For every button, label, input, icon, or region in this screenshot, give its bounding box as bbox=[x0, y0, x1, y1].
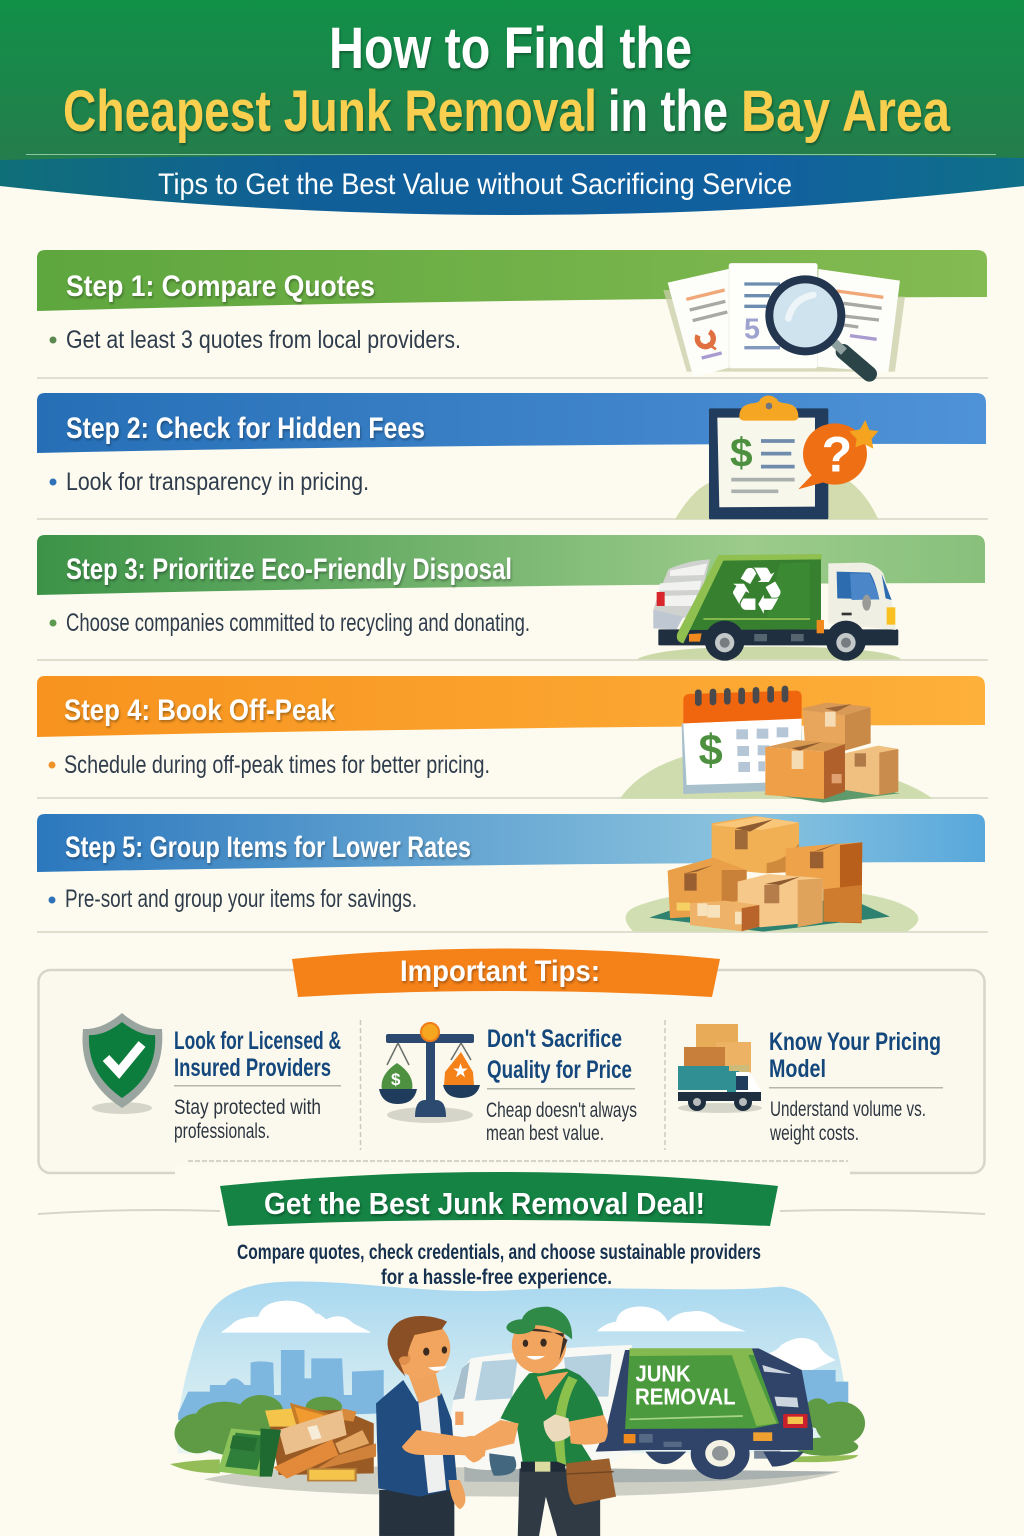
tip: pricing model: Know Your Pricing bbox=[769, 1028, 941, 1056]
person: customer bbox=[376, 1316, 487, 1536]
panel: step 3 bbox=[37, 535, 988, 661]
green bin bbox=[218, 1428, 281, 1477]
icon: balance scale bbox=[379, 1023, 480, 1123]
tip: licensed providers: Insured Providers bbox=[174, 1054, 331, 1082]
title: How to Find the bbox=[329, 16, 692, 81]
tip: quality for price: Don't Sacrifice bbox=[487, 1025, 622, 1053]
icon: calendar and boxes bbox=[620, 689, 933, 803]
title bbox=[63, 16, 951, 144]
panel: step 1 bbox=[37, 250, 988, 379]
tip: pricing model: weight costs. bbox=[769, 1122, 859, 1145]
white van bbox=[448, 1345, 632, 1476]
subtitle: Tips to Get the Best Value without Sacrificing Service bbox=[158, 168, 792, 201]
icon: stacked boxes bbox=[626, 816, 918, 932]
tip: quality for price: Quality for Price bbox=[487, 1056, 632, 1084]
tip: pricing model: Model bbox=[769, 1055, 826, 1083]
junk removal truck: REMOVAL bbox=[635, 1385, 736, 1410]
icon: documents and magnifier: 5 bbox=[744, 313, 760, 345]
step 3 text: Choose companies committed to recycling and donating. bbox=[66, 609, 530, 637]
icon: clipboard with question bubble: $ bbox=[730, 430, 753, 476]
ground bbox=[204, 1466, 840, 1497]
sky bbox=[177, 1282, 849, 1453]
step 4 text: Schedule during off-peak times for better pricing. bbox=[64, 751, 490, 779]
icon: shield with check bbox=[82, 1013, 162, 1114]
icon: recycling truck bbox=[637, 553, 902, 661]
step 5 text: Pre-sort and group your items for savings. bbox=[65, 885, 417, 913]
bushes bbox=[175, 1395, 865, 1457]
tip: licensed providers: professionals. bbox=[174, 1120, 270, 1143]
person: driver bbox=[460, 1307, 616, 1536]
icon: balance scale: ★ bbox=[452, 1060, 469, 1082]
tip: quality for price: mean best value. bbox=[486, 1122, 604, 1145]
tip: licensed providers: Look for Licensed & bbox=[174, 1027, 341, 1055]
tip: quality for price: Cheap doesn't always bbox=[486, 1099, 637, 1122]
tip: pricing model: Understand volume vs. bbox=[770, 1098, 926, 1121]
icon: calendar and boxes: $ bbox=[699, 727, 723, 775]
step 3 heading: Step 3: Prioritize Eco-Friendly Disposal bbox=[66, 553, 512, 586]
city skyline bbox=[178, 1350, 848, 1420]
clouds bbox=[221, 1301, 836, 1373]
panel: step 5 bbox=[37, 814, 988, 933]
title: Bay Area bbox=[741, 79, 951, 144]
step 1 heading: Step 1: Compare Quotes bbox=[66, 270, 375, 303]
title: Cheapest Junk Removal bbox=[63, 79, 597, 144]
tip: licensed providers bbox=[82, 1013, 341, 1143]
illustration: handshake with junk removal truck bbox=[170, 1282, 865, 1536]
step 5 heading: Step 5: Group Items for Lower Rates bbox=[65, 831, 471, 864]
icon: clipboard with question bubble: ? bbox=[822, 427, 852, 483]
icon: balance scale: $ bbox=[391, 1070, 401, 1089]
step 4 heading: Step 4: Book Off-Peak bbox=[64, 694, 335, 727]
step 2 heading: Step 2: Check for Hidden Fees bbox=[66, 412, 425, 445]
icon: documents and magnifier bbox=[663, 263, 905, 377]
junk removal truck bbox=[596, 1348, 813, 1479]
step 2 text: Look for transparency in pricing. bbox=[66, 468, 369, 496]
call to action ribbon bbox=[38, 1172, 985, 1226]
panel: step 2 bbox=[37, 393, 988, 520]
junk removal truck: JUNK bbox=[635, 1362, 691, 1387]
tips heading: Important Tips: bbox=[400, 955, 600, 988]
icon: recycling truck: ♻ bbox=[727, 553, 786, 629]
tip: quality for price bbox=[379, 1023, 637, 1145]
panel: important tips bbox=[38, 948, 984, 1177]
header banner bbox=[0, 0, 1024, 215]
title: in the bbox=[608, 79, 728, 144]
tips ribbon bbox=[292, 948, 720, 997]
call to action text: Compare quotes, check credentials, and choose sustainable providers bbox=[237, 1241, 761, 1264]
step 1 text: Get at least 3 quotes from local providers. bbox=[66, 326, 461, 354]
tip: licensed providers: Stay protected with bbox=[174, 1096, 321, 1119]
icon: clipboard with question bubble bbox=[675, 395, 878, 519]
panel: step 4 bbox=[37, 676, 988, 803]
icon: loaded truck bbox=[678, 1024, 762, 1113]
call to action heading: Get the Best Junk Removal Deal! bbox=[264, 1186, 705, 1221]
call to action text bbox=[237, 1241, 761, 1289]
junk pile bbox=[265, 1405, 376, 1481]
call to action text: for a hassle-free experience. bbox=[381, 1266, 612, 1289]
tip: pricing model bbox=[678, 1024, 943, 1145]
